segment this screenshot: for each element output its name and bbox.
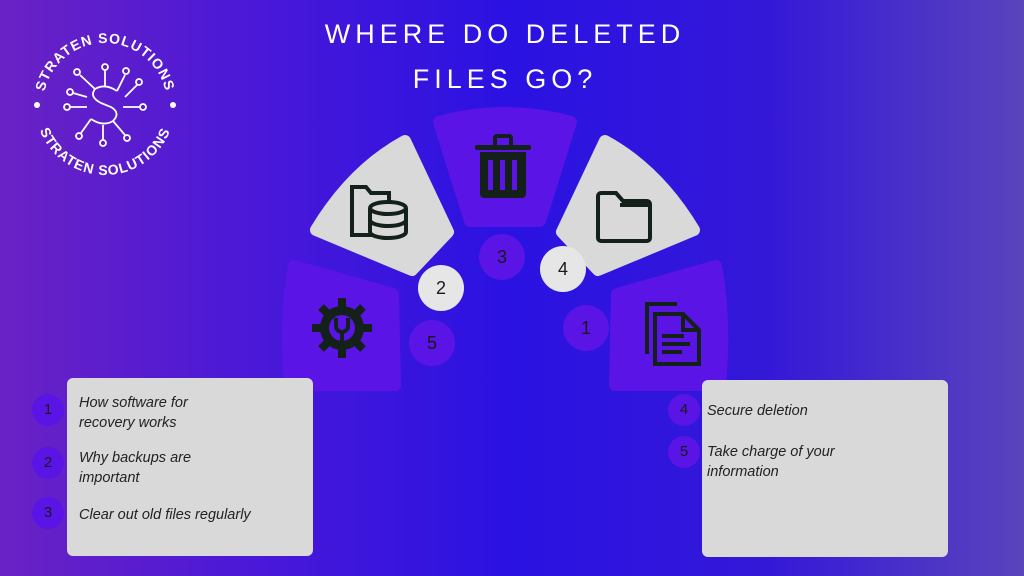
icon: trash [475,136,531,198]
text: Why backups are [79,450,191,466]
icon: database folder [352,187,406,238]
segment: trash [439,113,571,221]
text: Take charge of your [707,444,835,460]
title: WHERE DO DELETED [325,19,685,49]
number circles on wheel [409,234,609,366]
logo: STRATEN SOLUTIONS [36,33,174,91]
segment: documents [615,266,722,385]
logo: STRATEN SOLUTIONS [40,128,169,176]
panel: right list [702,380,948,557]
text: 1 [44,401,52,418]
text: 5 [427,333,437,353]
text: 3 [497,247,507,267]
panel: left list [67,378,313,556]
segment: gear [288,266,395,385]
text: 2 [436,278,446,298]
text: important [79,470,139,486]
icon: folder [598,193,650,241]
title: FILES GO? [413,64,597,94]
text: 5 [680,443,688,460]
title [324,19,685,94]
logo [34,33,176,176]
text: 4 [558,259,568,279]
text: 2 [44,454,52,471]
text: recovery works [79,415,176,431]
text: 3 [44,504,52,521]
icon: gear [312,298,372,358]
text: Clear out old files regularly [79,507,251,523]
text: Secure deletion [707,403,808,419]
text: 1 [581,318,591,338]
text: How software for [79,395,188,411]
icon: documents [647,304,699,364]
text: information [707,464,779,480]
segment: folder [562,141,694,270]
segment: database folder [316,141,448,270]
text: 4 [680,401,688,418]
